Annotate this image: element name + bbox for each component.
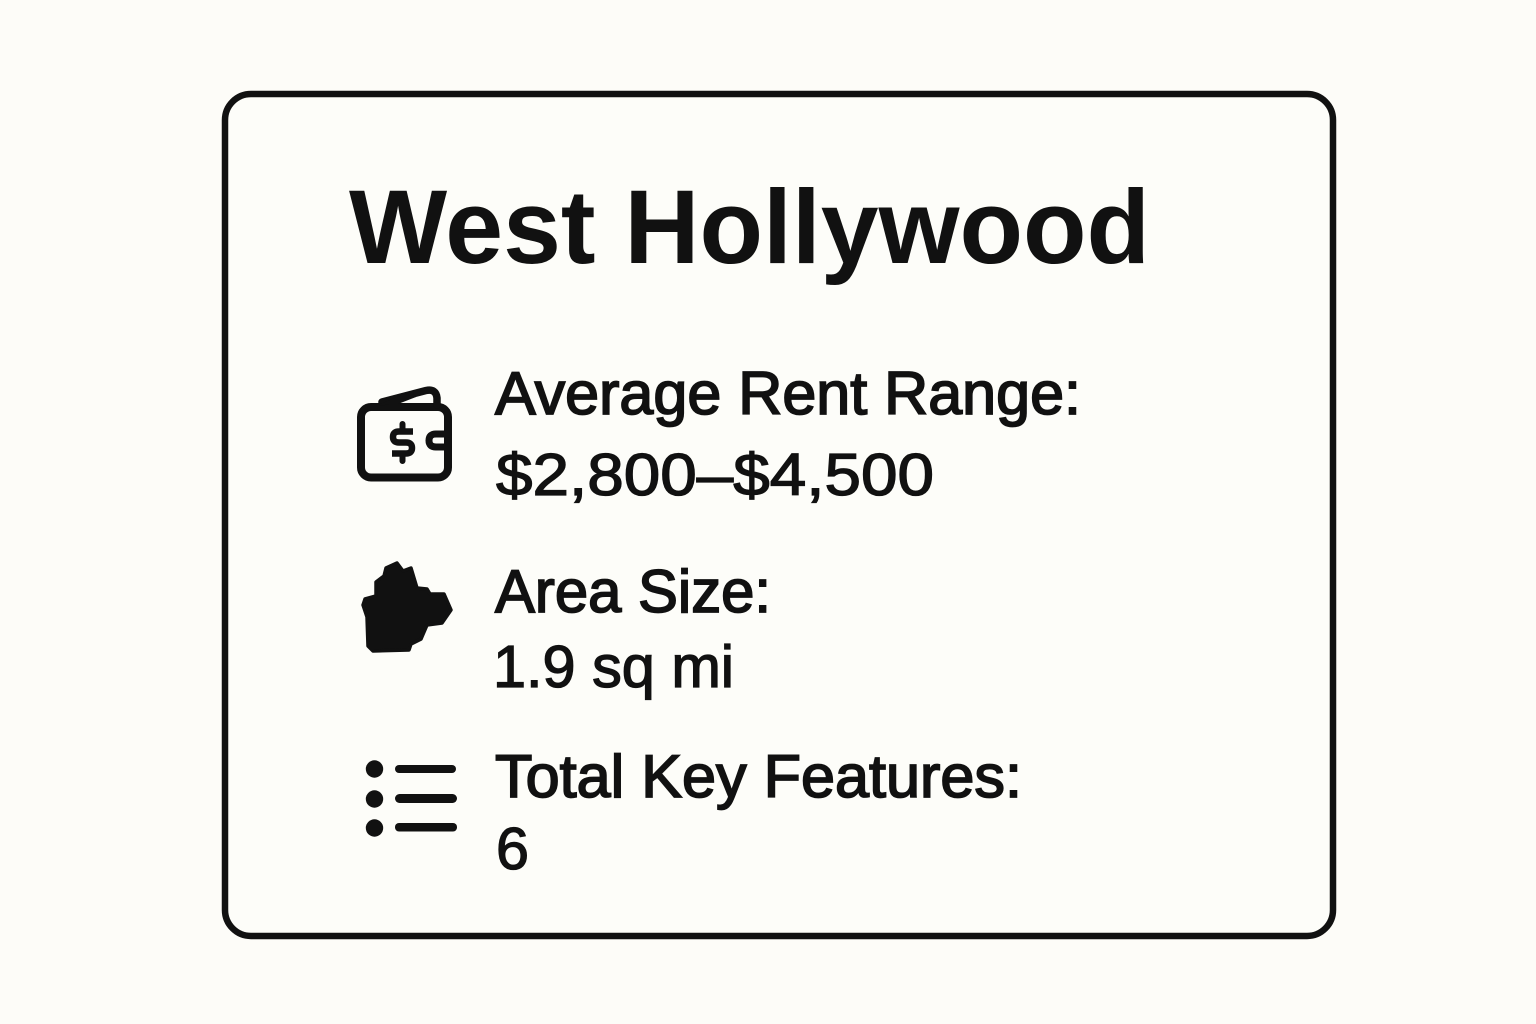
title: West Hollywood [349, 169, 1150, 286]
icon: bullet list [366, 760, 457, 837]
icon: area map silhouette [363, 563, 451, 651]
label: area size: Area Size: [495, 558, 771, 625]
value: rent range: $2,800–$4,500 [496, 442, 934, 508]
value: total key features: 6 [496, 816, 529, 882]
value: area size: 1.9 sq mi [493, 634, 734, 700]
label: average rent range: Average Rent Range: [495, 360, 1081, 427]
panel: West Hollywood card [225, 94, 1333, 936]
icon: wallet with dollar sign [361, 390, 448, 478]
label: total key features: Total Key Features: [495, 743, 1022, 810]
